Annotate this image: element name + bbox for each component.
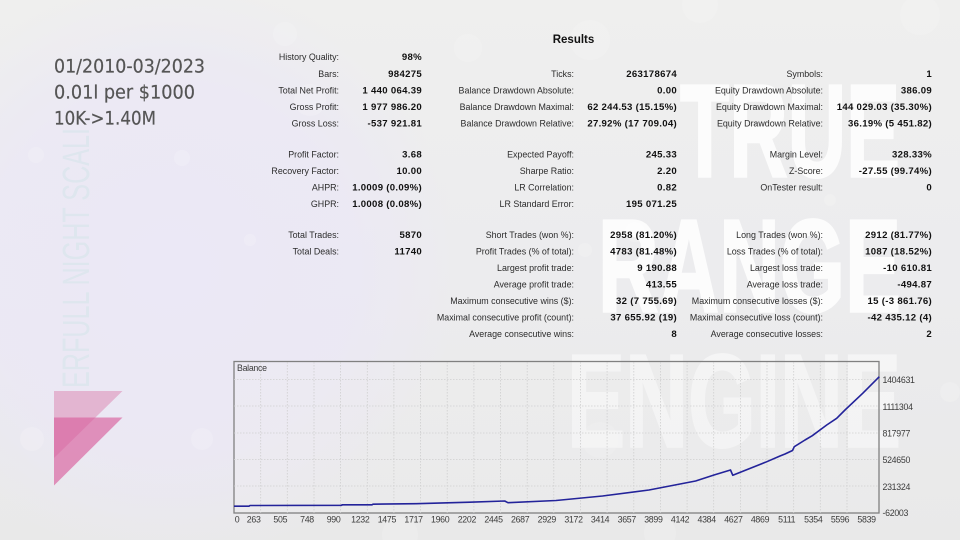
column 3 labels: Largest loss trade: [750, 263, 823, 273]
column 3 labels: Equity Drawdown Maximal: [716, 102, 823, 112]
column 1 values: 3.68 [402, 150, 422, 160]
x axis labels: 1232 [351, 514, 370, 524]
column 1 labels: Total Deals: [293, 246, 339, 256]
column 1 values [352, 52, 422, 258]
x axis labels: 263 [247, 514, 261, 524]
results table [271, 52, 932, 340]
column 3 values: -42 435.12 (4) [868, 312, 932, 324]
column 1 labels: Recovery Factor: [271, 166, 339, 176]
column 2 values: 263178674 [626, 69, 677, 80]
big background title: TRUE RANGE ENGINE [567, 58, 901, 474]
column 1 values: 984275 [388, 69, 422, 80]
y axis labels: 1404631 [882, 375, 915, 385]
column 3 labels: Maximal consecutive loss (count): [690, 312, 823, 322]
column 2 values: 62 244.53 (15.15%) [587, 102, 677, 113]
column 2 labels: Profit Trades (% of total): [476, 246, 574, 256]
column 3 values: 144 029.03 (35.30%) [837, 102, 932, 113]
x axis labels: 5354 [804, 514, 823, 524]
column 3 values: 328.33% [892, 150, 932, 160]
balance chart [234, 362, 915, 524]
column 3 labels: OnTester result: [760, 182, 823, 192]
column 2 values: 195 071.25 [626, 199, 677, 210]
column 2 values: 0.00 [657, 86, 677, 96]
column 3 labels [690, 69, 823, 339]
balance line [234, 377, 879, 506]
x axis labels: 505 [273, 514, 288, 524]
column 2 values: 0.82 [657, 182, 677, 194]
column 3 values: 36.19% (5 451.82) [848, 118, 932, 130]
column 1 labels: Gross Profit: [290, 102, 339, 112]
icon: pink triangles [54, 391, 122, 486]
column 1 values: 1.0008 (0.08%) [352, 199, 422, 210]
x axis labels: 4142 [671, 514, 690, 524]
column 2 values: 245.33 [646, 150, 677, 160]
x axis labels: 2687 [511, 514, 530, 524]
column 2 labels: Average consecutive wins: [469, 329, 574, 339]
column 1 values: 5870 [399, 230, 422, 241]
column 3 labels: Long Trades (won %): [736, 230, 823, 240]
column 1 values: 10.00 [396, 166, 422, 177]
column 2 values: 2.20 [657, 166, 677, 177]
column 2 values: 413.55 [646, 280, 677, 290]
column 1 labels: Total Trades: [288, 230, 339, 240]
y axis labels [882, 375, 915, 518]
column 3 values [837, 69, 932, 340]
summary text: period, lot size, growth: 01/2010-03/2023 [54, 56, 205, 78]
column 2 labels: Expected Payoff: [507, 150, 574, 160]
x axis labels: 5111 [778, 514, 796, 524]
x axis labels: 5596 [831, 514, 850, 524]
column 2 values: 27.92% (17 709.04) [587, 118, 677, 130]
column 3 labels: Z-Score: [789, 166, 823, 176]
column 3 values: -10 610.81 [883, 263, 932, 274]
column 2 labels [437, 69, 574, 339]
x axis labels: 5839 [857, 514, 876, 524]
column 3 values: 2912 (81.77%) [865, 230, 932, 241]
column 1 labels: AHPR: [312, 182, 339, 192]
column 1 values: 1 440 064.39 [362, 86, 422, 96]
column 3 labels: Average loss trade: [747, 280, 823, 290]
column 3 values: -494.87 [897, 280, 932, 290]
column 2 labels: Maximal consecutive profit (count): [437, 312, 574, 322]
summary text: period, lot size, growth: 0.01l per $1000 [54, 82, 195, 104]
column 2 labels: Short Trades (won %): [486, 230, 574, 240]
x axis labels: 1960 [431, 514, 450, 524]
column 1 values: 98% [402, 52, 422, 63]
column 3 labels: Loss Trades (% of total): [727, 246, 823, 256]
column 2 values: 8 [671, 329, 677, 340]
x axis labels: 3657 [618, 514, 636, 524]
column 3 labels: Equity Drawdown Absolute: [715, 86, 823, 96]
summary text: period, lot size, growth [54, 56, 205, 130]
x axis labels: 2445 [484, 514, 503, 524]
x axis labels: 1475 [378, 514, 396, 524]
column 3 values: 15 (-3 861.76) [868, 296, 932, 307]
x axis labels: 748 [300, 514, 314, 524]
column 2 labels: Balance Drawdown Maximal: [460, 102, 574, 112]
column 2 labels: Balance Drawdown Absolute: [459, 86, 574, 96]
y axis labels: -62003 [882, 508, 908, 518]
column 2 labels: Average profit trade: [494, 280, 574, 290]
x axis labels: 0 [235, 514, 240, 524]
column 3 values: -27.55 (99.74%) [859, 166, 932, 177]
column 2 labels: Largest profit trade: [497, 263, 574, 273]
column 2 labels: Ticks: [551, 69, 574, 79]
column 1 labels: Total Net Profit: [278, 86, 339, 96]
heading: Results: Results [553, 34, 594, 46]
column 1 labels: Profit Factor: [288, 150, 339, 160]
column 2 labels: Sharpe Ratio: [520, 166, 574, 176]
column 1 labels: Bars: [318, 69, 339, 79]
column 3 labels: Equity Drawdown Relative: [717, 118, 823, 128]
column 1 values: -537 921.81 [367, 118, 422, 130]
y axis labels: 817977 [882, 428, 910, 438]
column 1 values: 1 977 986.20 [362, 102, 422, 113]
column 2 values: 37 655.92 (19) [610, 312, 677, 324]
column 3 labels: Maximum consecutive losses ($): [692, 296, 823, 306]
column 2 values: 32 (7 755.69) [616, 296, 677, 307]
y axis labels: 231324 [882, 482, 910, 492]
column 3 labels: Symbols: [786, 69, 823, 79]
column 2 values: 2958 (81.20%) [610, 230, 677, 241]
column 2 labels: Balance Drawdown Relative: [461, 118, 574, 128]
column 3 values: 1 [926, 69, 932, 80]
column 1 labels: Gross Loss: [292, 118, 339, 128]
column 3 labels: Margin Level: [770, 150, 823, 160]
column 2 values: 4783 (81.48%) [610, 246, 677, 258]
x axis labels [235, 514, 876, 524]
column 3 labels: Average consecutive losses: [711, 329, 823, 339]
column 2 values [587, 69, 677, 340]
x axis labels: 4627 [724, 514, 743, 524]
x axis labels: 3172 [564, 514, 583, 524]
column 1 values: 11740 [394, 246, 422, 258]
column 1 values: 1.0009 (0.09%) [352, 182, 422, 194]
column 1 labels: GHPR: [311, 199, 339, 209]
x axis labels: 4384 [698, 514, 716, 524]
column 3 values: 1087 (18.52%) [865, 246, 932, 258]
x axis labels: 4869 [751, 514, 770, 524]
column 2 labels: LR Correlation: [514, 182, 574, 192]
chart frame [234, 362, 879, 513]
x axis labels: 3899 [644, 514, 663, 524]
column 3 values: 0 [926, 182, 932, 194]
x axis labels: 3414 [591, 514, 610, 524]
x axis labels: 2202 [458, 514, 476, 524]
y axis labels: 1111304 [882, 402, 913, 412]
vertical faint title: ERFULL NIGHT SCALI [56, 128, 98, 388]
column 3 values: 386.09 [901, 86, 932, 96]
summary text: period, lot size, growth: 10K->1.40M [54, 108, 156, 130]
x axis labels: 1717 [404, 514, 423, 524]
x axis labels: 2929 [538, 514, 556, 524]
x axis labels: 990 [327, 514, 341, 524]
column 1 labels [271, 52, 339, 256]
column 2 labels: LR Standard Error: [500, 199, 574, 209]
column 3 values: 2 [926, 329, 932, 340]
column 2 values: 9 190.88 [637, 263, 677, 274]
y axis labels: 524650 [882, 455, 910, 465]
column 2 labels: Maximum consecutive wins ($): [450, 296, 574, 306]
chart title: Balance [237, 363, 267, 373]
column 1 labels: History Quality: [279, 52, 339, 62]
